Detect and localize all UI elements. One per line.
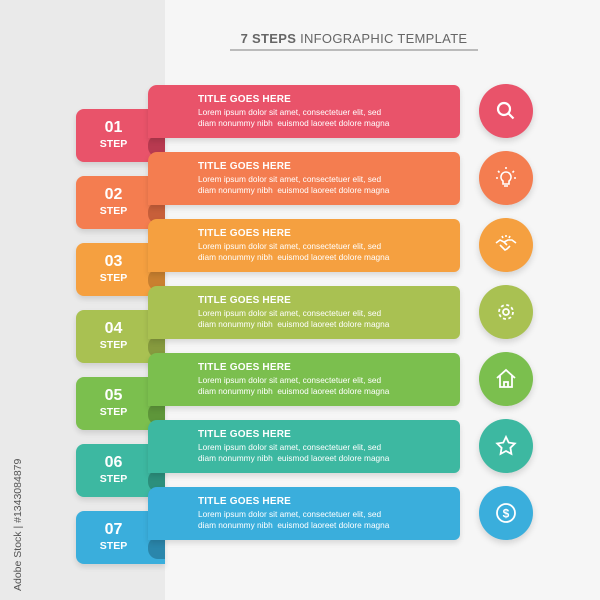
bar 7: Lorem ipsum dolor sit amet, consectetuer elit, sed: [198, 509, 381, 519]
icon: dollar: $: [503, 506, 510, 520]
step tab 05: STEP: [100, 406, 127, 418]
bar 2: [148, 152, 460, 205]
bar 1: TITLE GOES HERE: [198, 94, 291, 105]
bar 4: Lorem ipsum dolor sit amet, consectetuer elit, sed: [198, 308, 381, 318]
bar 4: [148, 286, 460, 339]
icon: dollar: [479, 486, 533, 540]
step tab 03: [76, 243, 165, 296]
step 1: [74, 84, 536, 166]
step tab 01: 01: [105, 119, 122, 136]
bar 2: Lorem ipsum dolor sit amet, consectetuer elit, sed: [198, 174, 381, 184]
step tab 03: 03: [105, 253, 122, 270]
bar 7: TITLE GOES HERE: [198, 496, 291, 507]
title: [230, 31, 478, 51]
bar 1: [148, 85, 460, 138]
bar 5: Lorem ipsum dolor sit amet, consectetuer elit, sed: [198, 375, 381, 385]
step tab 01: [76, 109, 165, 162]
step 4: [74, 285, 536, 368]
step tab 01: STEP: [100, 138, 127, 150]
bar 3: [148, 219, 460, 272]
bar 5: TITLE GOES HERE: [198, 362, 291, 373]
icon: handshake: [479, 218, 533, 272]
bar 1: Lorem ipsum dolor sit amet, consectetuer elit, sed: [198, 107, 381, 117]
bar 5: [148, 353, 460, 406]
step tab 04: STEP: [100, 339, 127, 351]
bar 1: diam nonummy nibh euismod laoreet dolore magna: [198, 118, 389, 128]
step tab 07: STEP: [100, 540, 127, 552]
step tab 04: [76, 310, 165, 363]
bar 7: [148, 487, 460, 540]
step 5: [74, 352, 536, 434]
bar 6: diam nonummy nibh euismod laoreet dolore magna: [198, 452, 389, 462]
bar 6: Lorem ipsum dolor sit amet, consectetuer elit, sed: [198, 442, 381, 452]
bar 6: [148, 420, 460, 473]
step 6: [74, 419, 536, 502]
step tab 06: [76, 444, 165, 497]
step 3: [74, 218, 536, 300]
bar 3: Lorem ipsum dolor sit amet, consectetuer elit, sed: [198, 241, 381, 251]
bar 4: TITLE GOES HERE: [198, 295, 291, 306]
step tab 06: 06: [105, 454, 122, 471]
icon: search: [479, 84, 533, 138]
bar 5: diam nonummy nibh euismod laoreet dolore magna: [198, 386, 389, 396]
step tab 05: [76, 377, 165, 430]
icon: home: [479, 352, 533, 406]
icon: gear: [479, 285, 533, 339]
bar 7: diam nonummy nibh euismod laoreet dolore magna: [198, 520, 389, 530]
step tab 06: STEP: [100, 473, 127, 485]
step tab 02: 02: [105, 186, 122, 203]
bar 2: diam nonummy nibh euismod laoreet dolore magna: [198, 184, 389, 194]
step tab 04: 04: [105, 320, 122, 337]
step tab 02: [76, 176, 165, 229]
step tab 05: 05: [105, 387, 122, 404]
bar 2: TITLE GOES HERE: [198, 161, 291, 172]
step tab 02: STEP: [100, 205, 127, 217]
watermark text: Adobe Stock | #1343084879: [12, 459, 24, 591]
step tab 03: STEP: [100, 272, 127, 284]
bar 4: diam nonummy nibh euismod laoreet dolore magna: [198, 318, 389, 328]
icon: star: [479, 419, 533, 473]
icon: bulb: [479, 151, 533, 205]
step 2: [74, 151, 536, 234]
title: 7 STEPS INFOGRAPHIC TEMPLATE: [241, 31, 467, 46]
step tab 07: 07: [105, 521, 122, 538]
bar 6: TITLE GOES HERE: [198, 429, 291, 440]
bar 3: diam nonummy nibh euismod laoreet dolore magna: [198, 252, 389, 262]
step tab 07: [76, 511, 165, 564]
step 7: [74, 486, 536, 568]
bar 3: TITLE GOES HERE: [198, 228, 291, 239]
